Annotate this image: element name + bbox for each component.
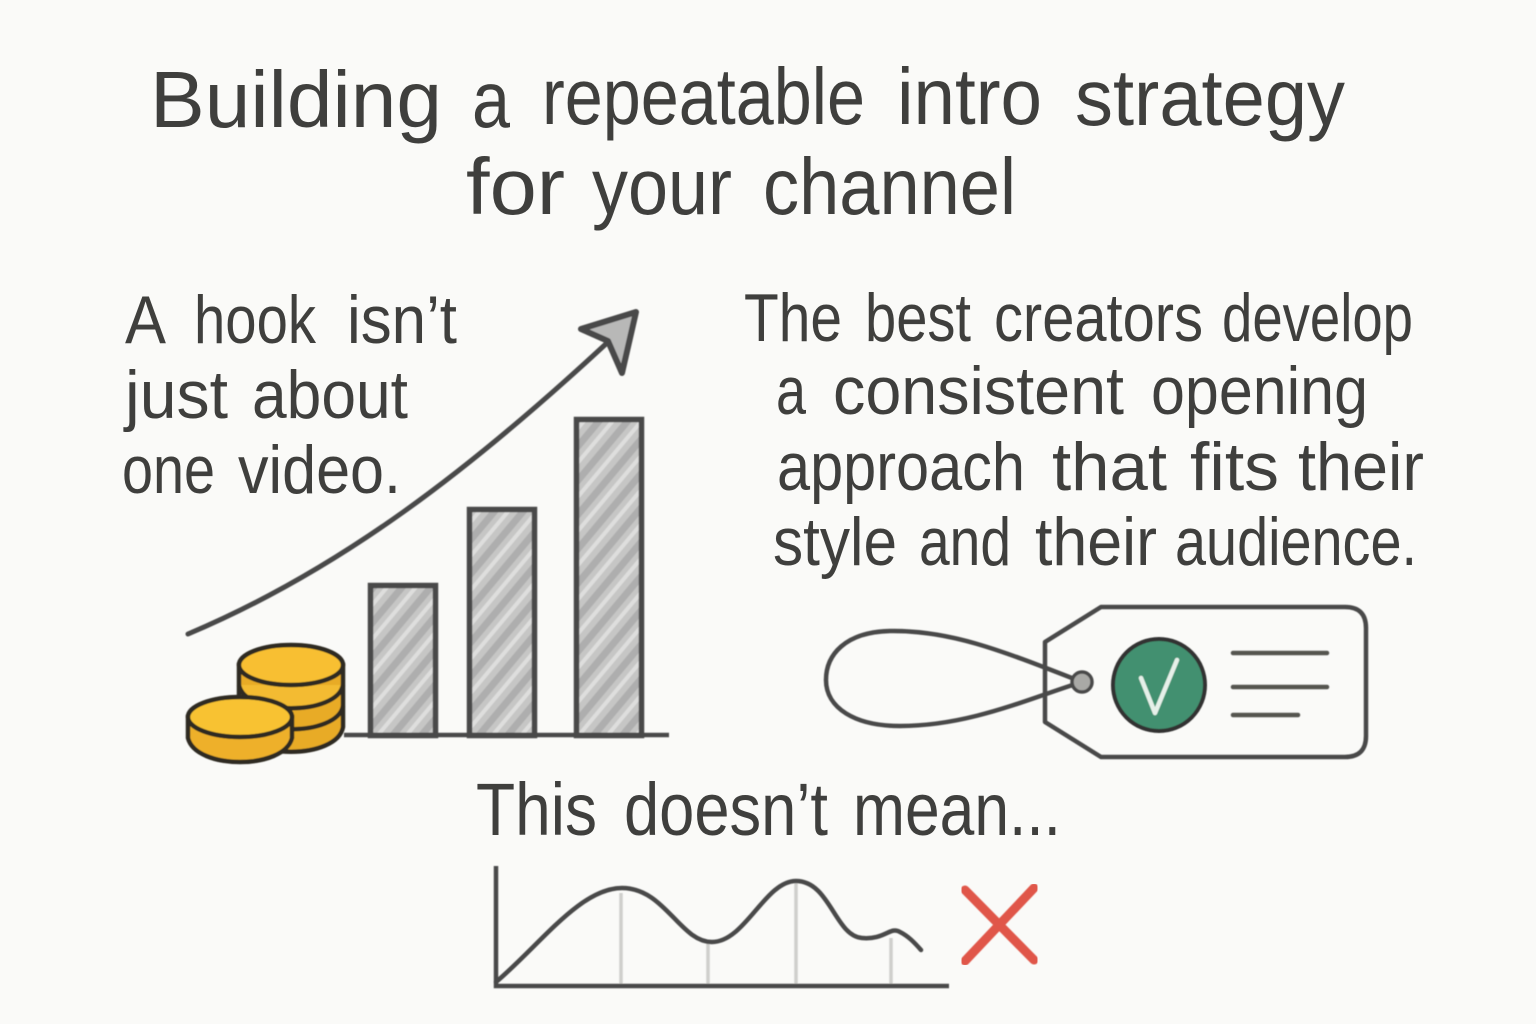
- text: this doesn't mean: doesn’t: [624, 768, 828, 851]
- eyelet: [1072, 672, 1092, 692]
- text block: best creators: best: [865, 280, 971, 356]
- text block: best creators: approach: [777, 429, 1025, 505]
- text block: best creators: that: [1052, 429, 1167, 505]
- text block: best creators: [744, 280, 1424, 580]
- text block: hook: about: [252, 357, 408, 433]
- baseline: [344, 733, 669, 737]
- bar chart with growth arrow: [188, 312, 669, 736]
- title: a: [472, 55, 510, 144]
- bar 2: [470, 510, 534, 736]
- text block: best creators: The: [744, 280, 842, 356]
- loop string: [826, 631, 1082, 726]
- curve: [496, 881, 921, 982]
- check mark: [1141, 660, 1177, 713]
- tag outline: [1045, 607, 1366, 757]
- text block: best creators: a: [776, 353, 806, 429]
- title: repeatable: [542, 52, 865, 141]
- text block: hook: just: [123, 357, 228, 433]
- text block: hook: isn’t: [347, 282, 457, 358]
- text block: hook: video.: [238, 432, 401, 508]
- title: strategy: [1075, 53, 1345, 142]
- text block: hook: hook: [194, 282, 317, 358]
- text: this doesn't mean: [476, 768, 1061, 851]
- axes: [496, 866, 949, 986]
- title: your: [592, 142, 732, 231]
- title: Building: [150, 55, 442, 144]
- text block: best creators: audience.: [1175, 504, 1417, 580]
- stack of three coins: [239, 645, 343, 752]
- text block: hook: [122, 282, 457, 508]
- tag text lines: [1233, 653, 1327, 715]
- bar 1: [370, 586, 436, 736]
- growth arrow: [188, 312, 636, 634]
- icon: tag with checkmark and loop: [826, 607, 1366, 757]
- bar 3: [576, 420, 642, 736]
- text block: hook: A: [125, 282, 167, 358]
- text block: best creators: and: [919, 504, 1011, 580]
- title: for: [466, 142, 565, 231]
- text block: best creators: consistent: [833, 353, 1124, 429]
- icon: coin stacks: [188, 645, 343, 762]
- title: intro: [897, 52, 1042, 141]
- text block: best creators: develop: [1222, 280, 1413, 356]
- text block: best creators: opening: [1151, 353, 1368, 429]
- text block: best creators: creators: [994, 280, 1203, 356]
- line chart: [496, 866, 949, 986]
- single coin: [188, 697, 292, 762]
- text block: best creators: their: [1298, 429, 1424, 505]
- icon: red cross: [965, 888, 1034, 961]
- text: this doesn't mean: mean...: [853, 768, 1061, 851]
- grid ticks: [621, 882, 891, 984]
- title: [150, 52, 1345, 231]
- title: channel: [763, 142, 1016, 231]
- green check badge: [1113, 639, 1205, 731]
- text: this doesn't mean: This: [476, 768, 597, 851]
- text block: best creators: style: [773, 504, 897, 580]
- text block: hook: one: [122, 432, 215, 508]
- text block: best creators: fits: [1190, 429, 1279, 505]
- text block: best creators: their: [1035, 504, 1157, 580]
